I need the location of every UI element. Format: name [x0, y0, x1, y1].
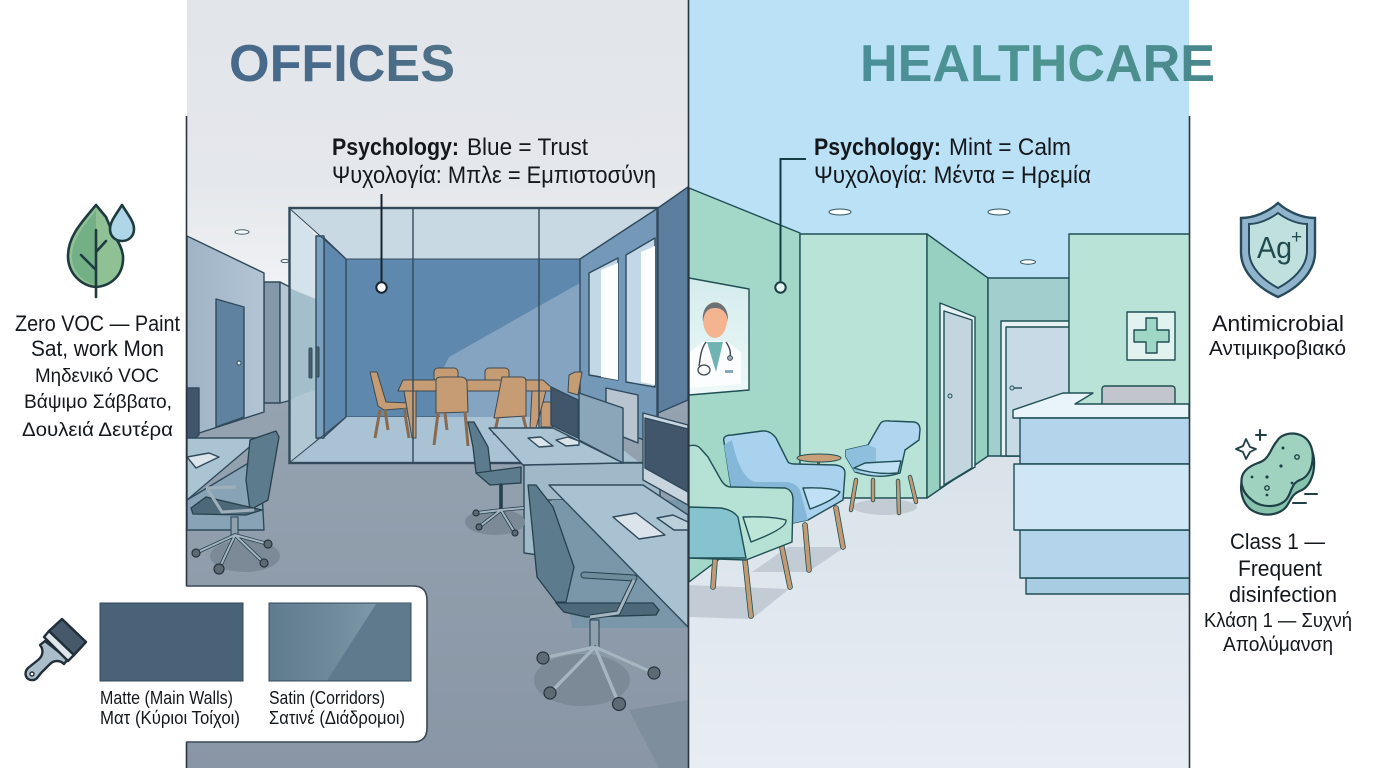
room ceiling: [289, 208, 658, 259]
icon: antimicrobial shield: Ag: [1257, 230, 1292, 265]
text: class 1: Απολύμανση: [1223, 634, 1333, 656]
text: class 1: disinfection: [1229, 582, 1337, 607]
meeting chairs and table: [370, 368, 582, 446]
right desk top: [549, 485, 688, 627]
panel: paint finishes: [26, 586, 427, 742]
office psychology text: [332, 134, 656, 189]
text: zero VOC: [15, 311, 180, 441]
label: matte: [100, 688, 240, 728]
healthcare psychology text: Ψυχολογία: Μέντα = Ηρεμία: [814, 162, 1091, 189]
text: class 1: Class 1 —: [1230, 529, 1325, 554]
label: satin: Satin (Corridors): [269, 688, 385, 708]
label: matte: Ματ (Κύριοι Τοίχοι): [100, 708, 240, 728]
label: satin: [269, 688, 405, 728]
icon: paint brush: [26, 619, 86, 680]
text: antimicrobial: Antimicrobial: [1212, 311, 1344, 336]
meeting room: [289, 208, 658, 463]
right desk: [549, 413, 688, 628]
reception desk: [1013, 386, 1190, 594]
healthcare floor: [689, 456, 1189, 768]
office floor: [187, 400, 688, 768]
centre monitor: [551, 387, 579, 446]
glass door: [289, 208, 324, 463]
title: offices: OFFICES: [229, 35, 455, 93]
text: class 1: Κλάση 1 — Συχνή: [1204, 610, 1352, 632]
reception monitor: [1102, 386, 1175, 406]
divider lines: [186, 0, 1190, 768]
icon: antimicrobial shield: [1241, 203, 1315, 297]
text: class 1: Frequent: [1238, 556, 1323, 581]
centre keyboard: [528, 437, 553, 447]
counter top: [1013, 393, 1189, 418]
panel: offices scene: [187, 0, 688, 768]
mouse pad: [657, 515, 688, 530]
office leader line: [376, 194, 387, 293]
callout: healthcare psychology: [775, 134, 1091, 293]
ceiling lights: [829, 209, 1036, 264]
office far right wall: [658, 187, 688, 413]
centre chair: [468, 422, 523, 536]
callout: office psychology: [332, 134, 656, 293]
front chair shadow: [689, 585, 789, 619]
healthcare psychology text: [814, 134, 1091, 189]
text: antimicrobial: [1209, 311, 1346, 360]
doctor figure: [690, 302, 741, 388]
left monitor: [187, 388, 199, 445]
text: antimicrobial: Αντιμικροβιακό: [1209, 338, 1346, 360]
office psychology text: Psychology:: [332, 134, 459, 161]
under desk: [552, 500, 688, 628]
finish panel background: [186, 586, 427, 742]
corridor end wall with door: [988, 278, 1069, 456]
office corridor wall: [264, 282, 292, 403]
middle chair shadow: [752, 547, 845, 572]
middle blue chair: [724, 431, 845, 570]
doctor poster: [689, 278, 749, 395]
right monitor: [643, 413, 688, 505]
chair shadow: [465, 509, 525, 535]
swatch: satin: [269, 603, 411, 681]
icon: medical cross sign: [1127, 312, 1175, 360]
front chair shadow: [534, 654, 630, 706]
healthcare left wall: [689, 188, 800, 582]
side table: [797, 454, 841, 467]
swatch: matte: [100, 603, 243, 681]
front mint chair: [689, 445, 793, 616]
text: zero VOC: Zero VOC — Paint: [15, 311, 180, 336]
healthcare leader line: [775, 159, 806, 293]
icon: leaf and water drop: [68, 205, 134, 297]
desk top: [489, 428, 623, 465]
panel: healthcare scene: [689, 0, 1190, 768]
healthcare side wall with door: [927, 234, 988, 498]
small blue chair: [846, 421, 920, 515]
icon: antimicrobial shield: +: [1291, 227, 1302, 248]
text: zero VOC: Βάψιμο Σάββατο,: [24, 391, 172, 413]
front office chair: [528, 485, 660, 710]
label: matte: Matte (Main Walls): [100, 688, 233, 708]
centre workstation: [465, 387, 660, 555]
left office chair: [191, 431, 279, 574]
left chair shadow: [210, 540, 280, 572]
back panel: [606, 388, 638, 443]
room right wall with windows: [580, 208, 658, 445]
left keyboard: [187, 453, 219, 468]
light beam on wall: [435, 283, 580, 417]
text: zero VOC: Μηδενικό VOC: [35, 365, 159, 387]
room floor: [289, 417, 640, 463]
title: healthcare: HEALTHCARE: [860, 35, 1215, 93]
office psychology text: Ψυχολογία: Μπλε = Εμπιστοσύνη: [332, 162, 656, 189]
office left wall with door: [187, 236, 264, 437]
left desk base: [187, 456, 264, 530]
healthcare right wall: [1069, 234, 1190, 424]
text: class 1: [1204, 529, 1352, 656]
ceiling lights: [235, 230, 289, 263]
left desk top: [187, 438, 260, 500]
text: zero VOC: Sat, work Mon: [31, 336, 164, 361]
healthcare psychology text: Psychology:: [814, 134, 941, 161]
label: satin: Σατινέ (Διάδρομοι): [269, 708, 405, 728]
healthcare back wall: [800, 234, 927, 498]
icon: sponge: [1236, 430, 1317, 515]
text: zero VOC: Δουλειά Δευτέρα: [22, 419, 173, 441]
left desk: [187, 388, 280, 574]
glass front frame: [289, 208, 658, 463]
room back wall: [346, 259, 580, 417]
healthcare psychology text: Mint = Calm: [949, 134, 1071, 161]
office psychology text: Blue = Trust: [467, 134, 588, 161]
right keyboard: [613, 513, 665, 539]
room left wall: [324, 238, 346, 437]
divider and desk base: [524, 463, 660, 555]
